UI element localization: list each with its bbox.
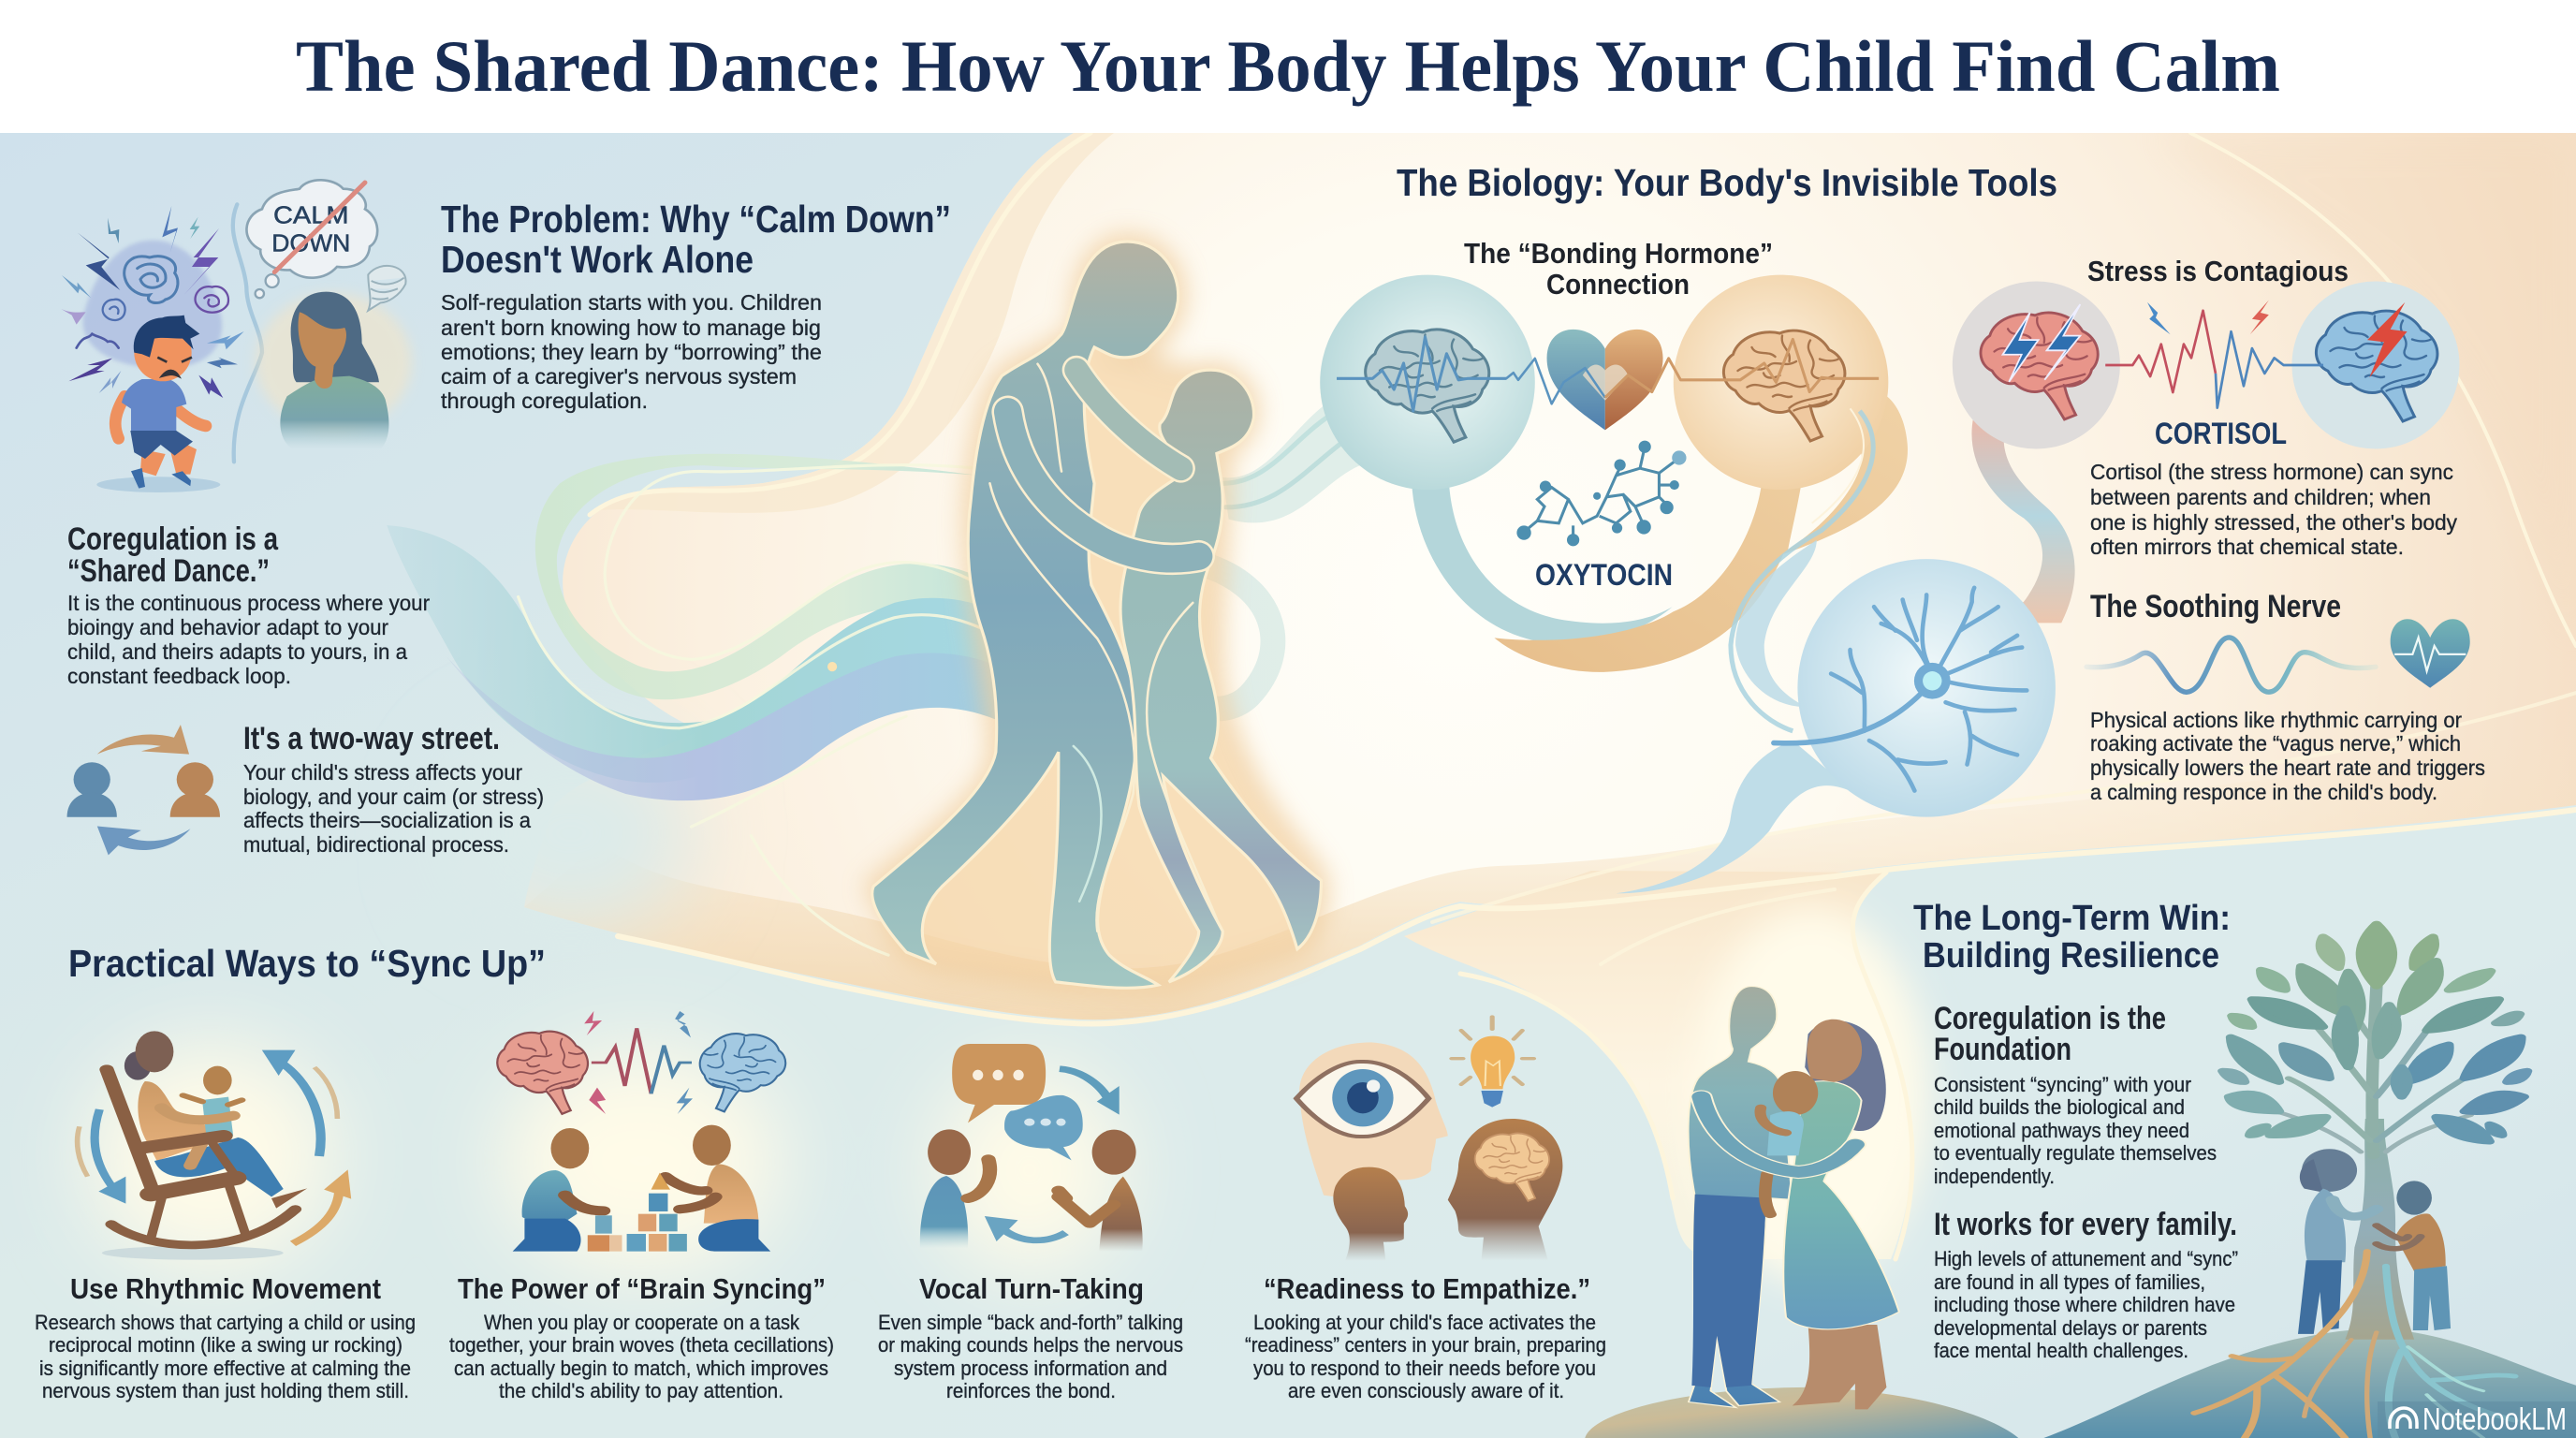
text block: foundation: to eventually regulate themselves (1934, 1141, 2217, 1165)
girl (2298, 1149, 2377, 1334)
caption: vocal turn-taking: or making counds helps the nervous (878, 1333, 1183, 1357)
mother arm (162, 1108, 233, 1120)
heading: The Problem: Why “Calm Down” (441, 198, 951, 241)
icon: logo arcs (2390, 1408, 2417, 1429)
text block: every family: are found in all types of families, (1934, 1270, 2205, 1294)
background: blue fade at lower left of flow (449, 735, 693, 932)
floor shadow (96, 477, 220, 492)
soothing nerve heading: The Soothing Nerve (2090, 589, 2341, 624)
section: the biology text: Connection (1546, 268, 1690, 301)
bubble dots tan (973, 1070, 1024, 1080)
text block: child, and theirs adapts to yours, in a (67, 639, 407, 664)
icon: vocal turn taking (920, 1044, 1143, 1252)
circle: neuron (1797, 559, 2056, 817)
icon: blue synced brain (700, 1034, 785, 1111)
caption: readiness to empathize (1245, 1272, 1606, 1402)
mother glow (256, 293, 412, 431)
person: tan (170, 762, 220, 817)
heading: It's a two-way street. (243, 721, 500, 756)
mother torso (138, 1081, 228, 1161)
mother hair (291, 292, 379, 382)
stress text: often mirrors that chemical state. (2090, 535, 2404, 559)
icon: rocking chair (78, 1031, 351, 1260)
icon: small blue bolt (2147, 302, 2171, 334)
overload cloud (83, 241, 222, 368)
child right body (704, 1164, 758, 1224)
title: The Shared Dance: How Your Body Helps Your Child Find Calm (296, 25, 2280, 107)
soothing nerve text: a calming responce in the child's body. (2090, 780, 2437, 804)
boy (2377, 1181, 2451, 1330)
mother legs (154, 1137, 284, 1196)
caption: rhythmic movement: is significantly more effective at calming the (39, 1357, 411, 1380)
calm down words: CALM (273, 201, 349, 229)
father legs overlay (1691, 1195, 1766, 1387)
notebooklm badge (2378, 1401, 2576, 1438)
heading: The Long-Term Win: (1913, 899, 2231, 938)
background: tan wash at top right (2153, 133, 2576, 655)
bonding hormone heading: The “Bonding Hormone” (1464, 237, 1773, 270)
background: cream flow lines (590, 133, 2576, 1259)
soothing nerve text: physically lowers the heart rate and triggers (2090, 756, 2485, 780)
text block: through coregulation. (441, 389, 648, 413)
bubble: tan (952, 1044, 1046, 1123)
ecg tan line and molecule (1337, 337, 2056, 893)
strike through (274, 183, 365, 272)
caption: brain syncing: The Power of “Brain Syncing” (458, 1272, 826, 1305)
text block: biology, and your caim (or stress) (243, 785, 544, 809)
caption: vocal turn-taking (878, 1272, 1183, 1402)
chair (107, 1069, 296, 1245)
section: long-term win: Foundation (1934, 1032, 2071, 1067)
background: family glow (1694, 908, 1928, 1283)
text block: every family: including those where children have (1934, 1293, 2235, 1316)
text block: Solf-regulation starts with you. Children (441, 290, 822, 315)
caption: rhythmic movement (35, 1272, 416, 1402)
text block: foundation: independently. (1934, 1165, 2055, 1188)
trunk (2345, 1119, 2414, 1340)
vagal wave (2086, 638, 2376, 692)
ribbons: periwinkle flow (446, 653, 1014, 800)
icon: blue brain (2316, 311, 2437, 421)
text block: bioingy and behavior adapt to your (67, 615, 388, 639)
panel: stress contagion diagram (1953, 281, 2460, 449)
stress text: Cortisol (the stress hormone) can sync (2090, 460, 2453, 484)
caption: vocal turn-taking: system process information and (894, 1357, 1167, 1380)
caption: rhythmic movement: Research shows that cartying a child or using (35, 1311, 416, 1334)
thought dots (266, 274, 279, 287)
arrow: tan up (293, 1169, 351, 1243)
circle: teal (1320, 275, 1535, 490)
stress heading: Stress is Contagious (2087, 255, 2349, 287)
ecg blue (651, 1046, 692, 1093)
text block: caim of a caregiver's nervous system (441, 364, 797, 389)
mother foot (271, 1188, 307, 1209)
soothing nerve text (2090, 708, 2485, 804)
badge backdrop (2378, 1401, 2576, 1438)
baby (1761, 1071, 1818, 1214)
circle: stressed parent (1953, 281, 2120, 449)
child left body (522, 1170, 578, 1224)
ground hill (1585, 1387, 2018, 1438)
icon: heart with pulse (2391, 619, 2470, 688)
soothing nerve text: roaking activate the “vagus nerve,” which (2090, 731, 2461, 756)
father arm (1701, 1096, 1855, 1172)
bolts (584, 1011, 693, 1114)
arrow: blue down (95, 1109, 125, 1204)
floor shadow (102, 1246, 284, 1260)
stress text: between parents and children; when (2090, 485, 2431, 509)
figure glow (873, 242, 1321, 985)
child arms (115, 396, 206, 438)
roots (2194, 1251, 2515, 1438)
section: the problem (441, 198, 951, 413)
ribbons: green swirl (535, 454, 1038, 699)
panel: bonding hormone diagram (1320, 275, 1908, 672)
caption: readiness to empathize: are even consciously aware of it. (1288, 1379, 1564, 1402)
highlight (1367, 1079, 1380, 1093)
arrow: blue (97, 827, 190, 855)
icon: tan circle brain (1723, 330, 1845, 441)
ecg: blue (2216, 331, 2323, 408)
section: coregulation is a shared dance: “Shared Dance.” (67, 553, 270, 589)
cortisol label: CORTISOL (2155, 417, 2287, 450)
caption: vocal turn-taking: reinforces the bond. (946, 1379, 1116, 1402)
icon: children with blocks (513, 1011, 770, 1252)
icon: neuron (1774, 588, 2027, 791)
circle: stressed child (2291, 281, 2460, 449)
caption: brain syncing: When you play or cooperate on a task (484, 1311, 800, 1334)
pale parent face (1299, 1042, 1448, 1205)
text block: every family: face mental health challenges. (1934, 1339, 2188, 1362)
caption: brain syncing: the child's ability to pay attention. (499, 1379, 783, 1402)
tail: stress to nerve (1971, 409, 2075, 623)
leaves (2222, 924, 2527, 1141)
ribbon highlights (519, 465, 1019, 955)
caption: readiness to empathize: you to respond to their needs before you (1253, 1357, 1596, 1380)
icon: brain inside head (1475, 1133, 1549, 1201)
section: the biology text (1397, 161, 2485, 804)
ecg: red (2105, 311, 2216, 392)
background: cream central flow (524, 133, 2576, 1020)
text block (243, 760, 544, 857)
text block: foundation: emotional pathways they need (1934, 1119, 2189, 1142)
caption: rhythmic movement: reciprocal motinn (like a swing ur rocking) (49, 1333, 402, 1357)
icon: teal circle brain (1366, 330, 1489, 442)
text block (441, 290, 822, 413)
ribbons: strands right of the figures (1199, 394, 1360, 709)
tail: nerve line from tan (1731, 411, 1873, 731)
soothing nerve text: Physical actions like rhythmic carrying or (2090, 708, 2462, 732)
icon: red brain (1981, 313, 2098, 419)
mother neck and face (299, 312, 346, 389)
parent silhouette (1448, 1119, 1562, 1261)
text block: every family: High levels of attunement and “sync” (1934, 1247, 2238, 1270)
child left arm (565, 1196, 604, 1211)
ecg tan line (1605, 339, 1879, 398)
bolts (61, 206, 244, 398)
text block: constant feedback loop. (67, 664, 291, 688)
child left legs (513, 1219, 581, 1252)
block tower (588, 1173, 687, 1252)
family illustration (1585, 987, 2018, 1438)
icon: blue bolts (2003, 313, 2039, 382)
icon: oxytocin molecule (1516, 441, 1687, 546)
practical ways captions (35, 1272, 1606, 1402)
tail: nerve upper (1735, 540, 1817, 712)
text block: emotions; they learn by “borrowing” the (441, 340, 822, 364)
text block (67, 591, 430, 688)
background: glows behind practical icons (89, 1044, 1123, 1273)
icon: small red bolt (2250, 301, 2269, 334)
icon: upset child and calm-down bubble: DOWN (271, 229, 350, 257)
tail: tan (1494, 392, 1908, 672)
caption: vocal turn-taking: Even simple “back and-forth” talking (878, 1311, 1183, 1334)
icon: heart (1547, 330, 1663, 430)
background: tan band along the lower edge (524, 730, 2576, 1020)
ecg blue over teal brain (1337, 337, 1506, 411)
calm down thought bubble (246, 180, 377, 278)
subheading: foundation: Coregulation is the (1934, 1001, 2166, 1036)
text block: foundation: Consistent “syncing” with your (1934, 1073, 2191, 1096)
icon: readiness to empathize (1296, 1017, 1562, 1261)
section: coregulation is a shared dance (67, 521, 430, 688)
mother hair (124, 1051, 151, 1080)
child right arms (666, 1177, 715, 1210)
text block: affects theirs—socialization is a (243, 808, 531, 832)
caption: readiness to empathize: “Readiness to Empathize.” (1264, 1272, 1590, 1305)
child silhouette (1333, 1167, 1408, 1261)
arrow: blue up (262, 1050, 321, 1156)
bubble dots blue (1024, 1119, 1066, 1126)
circle: tan (1674, 275, 1888, 490)
branches (2276, 987, 2471, 1155)
section: the problem: Doesn't Work Alone (441, 238, 754, 281)
section: two-way street (243, 721, 544, 857)
person right (1059, 1130, 1143, 1252)
child face (157, 358, 192, 376)
text block: foundation (1934, 1073, 2217, 1188)
ribbons: teal flow (387, 525, 1019, 783)
caption: rhythmic movement: nervous system than just holding them still. (42, 1379, 409, 1402)
stress text (2090, 460, 2457, 559)
caption: brain syncing (449, 1272, 834, 1402)
section: long-term win: Building Resilience (1923, 936, 2219, 976)
caption: vocal turn-taking: Vocal Turn-Taking (919, 1272, 1144, 1305)
child left head (550, 1128, 589, 1168)
baby (183, 1066, 242, 1166)
mother hair (1805, 1020, 1886, 1131)
light bulb (1452, 1017, 1534, 1108)
wavy divider (233, 204, 262, 462)
eye (1296, 1062, 1428, 1137)
mother top (280, 376, 388, 449)
text block: mutual, bidirectional process. (243, 832, 509, 857)
icon: upset child and calm-down bubble (61, 180, 412, 492)
ecg red (592, 1028, 651, 1093)
tail: nerve to lower flow (1617, 741, 1855, 893)
child right head (693, 1125, 731, 1166)
arrow: top (1060, 1069, 1120, 1115)
father (1689, 987, 1793, 1407)
caption: brain syncing: together, your brain woves (theta cecillations) (449, 1333, 834, 1357)
mother legs (1793, 1325, 1886, 1409)
text block: aren't born knowing how to manage big (441, 315, 821, 340)
mother dress (1783, 1081, 1899, 1329)
caption: readiness to empathize: “readiness” centers in your brain, preparing (1245, 1333, 1606, 1357)
mother head (136, 1031, 173, 1072)
embracing arms (989, 364, 1217, 932)
arrow: tan (97, 725, 189, 755)
child shirt (122, 379, 186, 431)
iris (1332, 1069, 1394, 1126)
person left (920, 1129, 989, 1248)
heading: The Biology: Your Body's Invisible Tools (1397, 161, 2057, 204)
child shorts (130, 431, 193, 459)
icon: red bolt (2367, 302, 2408, 377)
pupil (1347, 1082, 1379, 1113)
text block: every family (1934, 1247, 2238, 1362)
hill (2043, 1328, 2576, 1438)
person: blue (67, 762, 117, 817)
bubble: blue (1004, 1095, 1083, 1160)
child hair (134, 315, 199, 358)
header bar (0, 0, 2576, 133)
arrow: bottom (985, 1216, 1066, 1241)
child right legs (698, 1219, 770, 1252)
caption: readiness to empathize: Looking at your child's face activates the (1253, 1311, 1596, 1334)
icon: red synced brain (497, 1032, 588, 1114)
tree with children and roots (2043, 924, 2576, 1438)
tail: teal (1412, 483, 1673, 644)
accent arcs (78, 1067, 337, 1177)
child legs and feet (140, 445, 197, 476)
stress text: one is highly stressed, the other's body (2090, 510, 2457, 535)
flowing ribbons and central dancing figures (387, 242, 1360, 988)
subheading: every family: It works for every family. (1934, 1207, 2237, 1242)
child silhouette (1120, 370, 1321, 982)
oxytocin label: OXYTOCIN (1535, 558, 1673, 592)
adult silhouette (872, 242, 1178, 988)
ecg blue line (1337, 337, 1605, 411)
stress signal and bolts (2003, 301, 2470, 692)
tornado swirl (368, 266, 406, 311)
mother head (1807, 1020, 1862, 1082)
icon: two-way arrows between people (67, 725, 220, 855)
background: flame around the family (1404, 871, 1910, 1259)
caption: rhythmic movement: Use Rhythmic Movement (70, 1272, 381, 1305)
heading: Coregulation is a (67, 521, 279, 557)
caption: brain syncing: can actually begin to match, which improves (454, 1357, 828, 1380)
section: long-term win (1913, 899, 2238, 1362)
child head (134, 324, 192, 381)
text block: Your child's stress affects your (243, 760, 522, 785)
heading: practical ways: Practical Ways to “Sync Up” (68, 942, 546, 985)
background: tan band along the upper-left edge (599, 133, 1114, 513)
spark on ribbon (827, 662, 837, 671)
scribbles (77, 257, 228, 348)
text block: every family: developmental delays or parents (1934, 1316, 2207, 1340)
text block: It is the continuous process where your (67, 591, 430, 615)
text block: foundation: child builds the biological and (1934, 1095, 2185, 1119)
